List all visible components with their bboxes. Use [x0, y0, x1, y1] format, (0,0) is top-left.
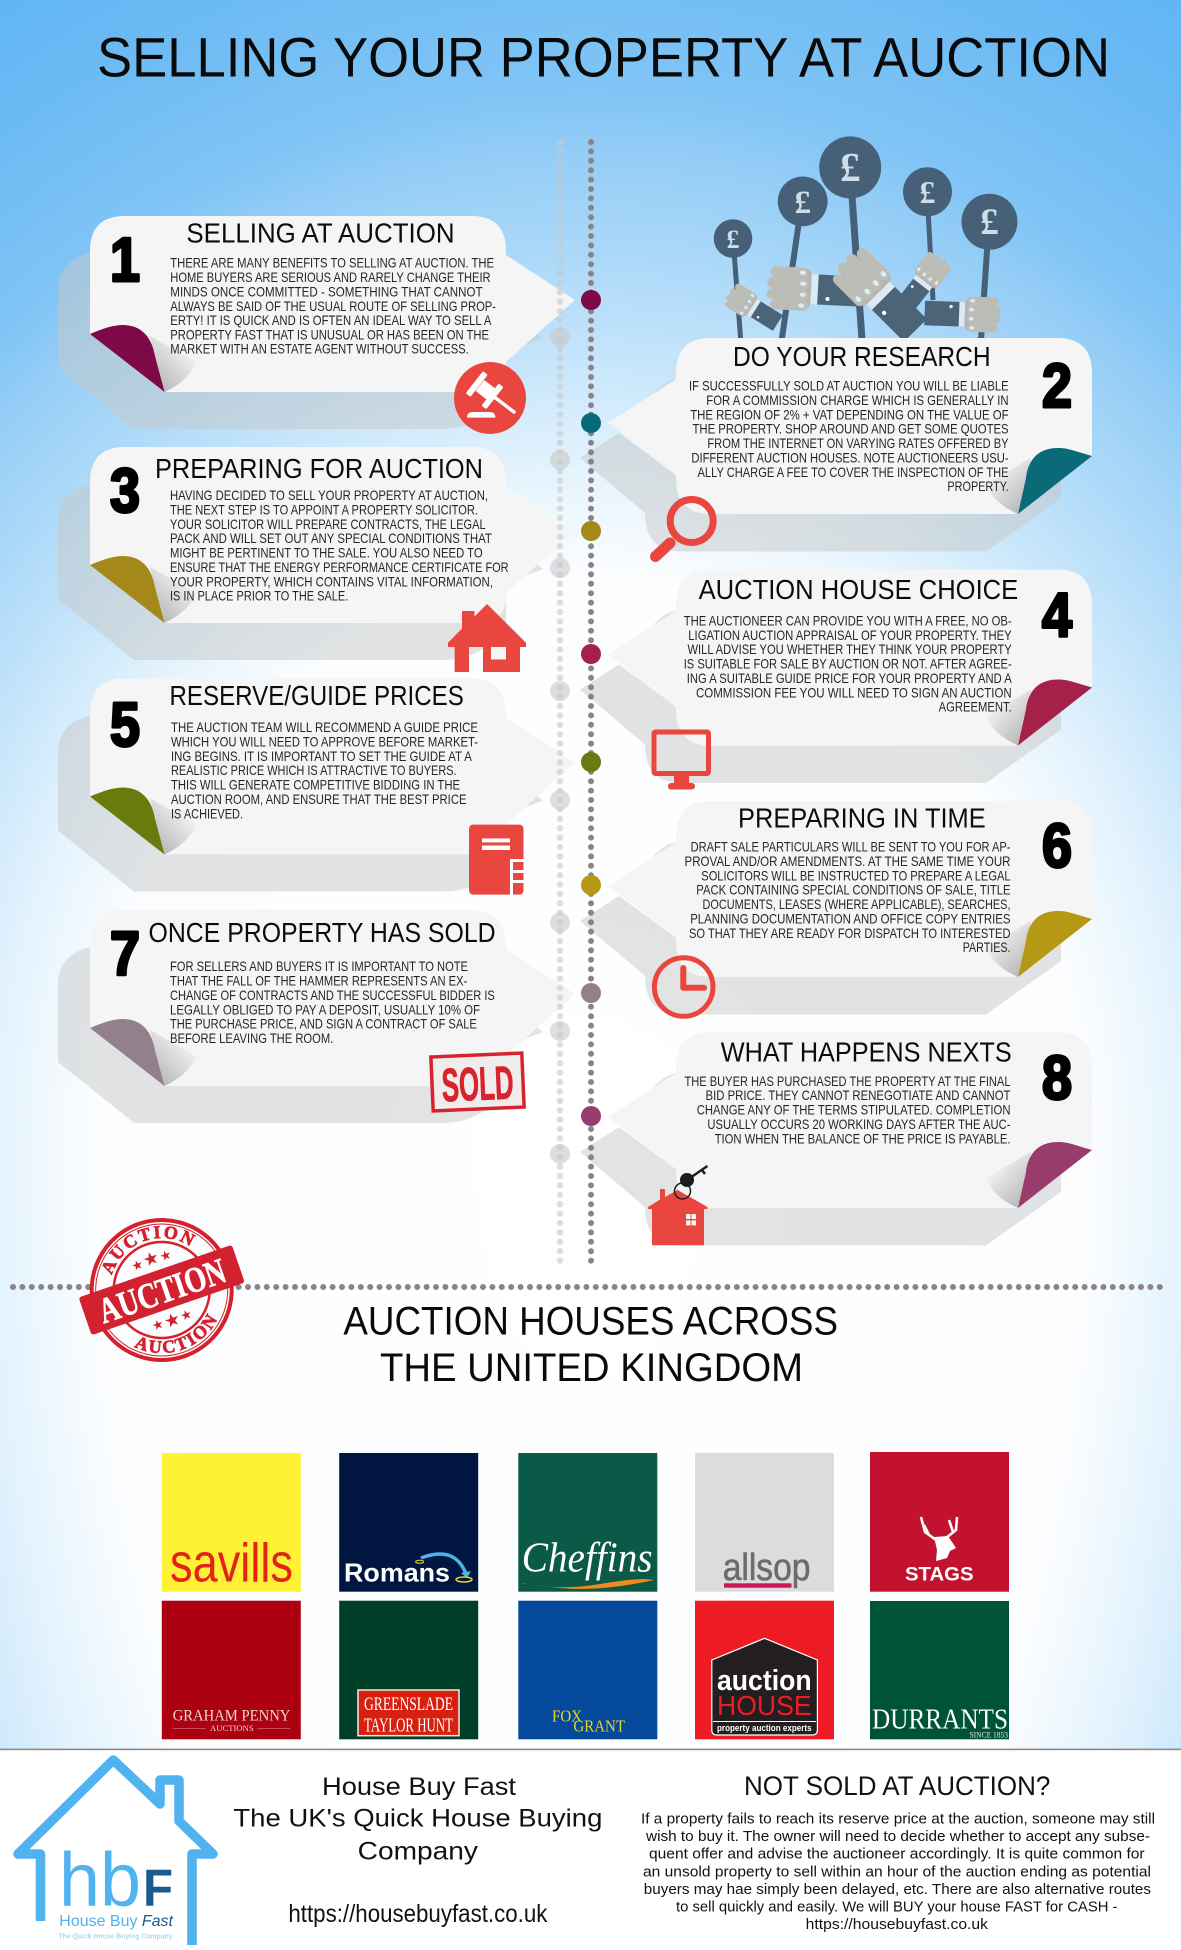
heading: auction houses: [343, 1299, 838, 1390]
body text: TION WHEN THE BALANCE OF THE PRICE IS PAYABLE.: [715, 1131, 1010, 1146]
logo: cheffins: Cheffins: [522, 1536, 653, 1582]
icon: gavel: [454, 362, 526, 434]
illustration: hands raising bidding paddles: £: [920, 174, 936, 210]
body text: THE AUCTION TEAM WILL RECOMMEND A GUIDE PRICE: [171, 720, 478, 735]
body text: MARKET WITH AN ESTATE AGENT WITHOUT SUCCESS.: [170, 342, 469, 357]
heading: auction houses: THE UNITED KINGDOM: [380, 1346, 803, 1390]
body text: ERTY! IT IS QUICK AND IS OFTEN AN IDEAL WAY TO SELL A: [170, 313, 492, 328]
company details: [233, 1773, 602, 1928]
panel 4: auction house choice: [580, 570, 1092, 790]
body text: WILL ADVISE YOU WHETHER THEY THINK YOUR PROPERTY: [688, 642, 1012, 657]
heading: DO YOUR RESEARCH: [733, 341, 991, 372]
body text: [170, 256, 496, 357]
logo: greenslade taylor hunt: GREENSLADE: [364, 1694, 453, 1715]
body text: MIGHT BE PERTINENT TO THE SALE. YOU ALSO NEED TO: [170, 546, 483, 560]
step number 2: 2: [1042, 352, 1072, 421]
step number 7: 7: [110, 920, 140, 989]
heading: PREPARING IN TIME: [738, 802, 986, 833]
illustration: hands raising bidding paddles: £: [794, 185, 811, 221]
body text: FOR SELLERS AND BUYERS IT IS IMPORTANT TO NOTE: [170, 959, 468, 974]
body text: THE REGION OF 2% + VAT DEPENDING ON THE VALUE OF: [690, 407, 1009, 422]
company details: Company: [358, 1837, 479, 1865]
logo: greenslade taylor hunt: [339, 1601, 478, 1739]
icon: sold stamp: [431, 1053, 524, 1112]
body text: HOME BUYERS ARE SERIOUS AND RARELY CHANGE THEIR: [170, 270, 491, 285]
logo: auction house: [695, 1601, 834, 1739]
not sold at auction: wish to buy it. The owner will need to decide whether to accept any subse-: [645, 1828, 1150, 1845]
logo: fox grant: FOX: [552, 1707, 582, 1726]
logo: fox grant: GRANT: [573, 1717, 626, 1736]
heading: RESERVE/GUIDE PRICES: [170, 680, 464, 711]
heading: WHAT HAPPENS NEXTS: [721, 1037, 1012, 1068]
body text: FROM THE INTERNET ON VARYING RATES OFFERED BY: [707, 436, 1009, 451]
body text: PACK CONTAINING SPECIAL CONDITIONS OF SALE, TITLE: [696, 883, 1010, 898]
body text: DIFFERENT AUCTION HOUSES. NOTE AUCTIONEERS USU-: [691, 450, 1009, 465]
not sold at auction: [641, 1771, 1155, 1933]
logo: stags: [870, 1452, 1009, 1592]
logo: greenslade taylor hunt: TAYLOR HUNT: [364, 1715, 453, 1737]
logo: durrants: DURRANTS: [872, 1703, 1008, 1735]
body text: BEFORE LEAVING THE ROOM.: [170, 1031, 333, 1046]
body text: AUCTION ROOM, AND ENSURE THAT THE BEST PRICE: [171, 792, 466, 807]
body text: BID PRICE. THEY CANNOT RENEGOTIATE AND CANNOT: [706, 1088, 1011, 1103]
illustration: hands raising bidding paddles: £: [726, 225, 740, 254]
body text: IS ACHIEVED.: [171, 806, 243, 821]
icon: computer monitor: [654, 732, 708, 790]
body text: THAT THE FALL OF THE HAMMER REPRESENTS AN EX-: [170, 974, 467, 989]
heading: auction houses: AUCTION HOUSES ACROSS: [343, 1299, 838, 1343]
panel 6: preparing in time: [580, 801, 1092, 1016]
icon: auction stamp: AUCTION: [102, 1226, 196, 1276]
step number 4: 4: [1042, 581, 1072, 650]
body text: WHICH YOU WILL NEED TO APPROVE BEFORE MARKET-: [171, 734, 478, 749]
not sold at auction: NOT SOLD AT AUCTION?: [744, 1771, 1050, 1801]
body text: ALWAYS BE SAID OF THE USUAL ROUTE OF SELLING PROP-: [170, 299, 496, 314]
panel 2: do your research: [580, 338, 1092, 556]
body text: THE BUYER HAS PURCHASED THE PROPERTY AT THE FINAL: [684, 1074, 1011, 1089]
body text: IF SUCCESSFULLY SOLD AT AUCTION YOU WILL BE LIABLE: [689, 378, 1009, 394]
company details: The UK's Quick House Buying: [233, 1805, 602, 1833]
logo: house buy fast: [18, 1760, 213, 1945]
logo: graham penny: GRAHAM PENNY: [173, 1708, 290, 1725]
body text: ING A SUITABLE GUIDE PRICE FOR YOUR PROPERTY AND A: [687, 671, 1012, 686]
logo: auction house: HOUSE: [717, 1690, 812, 1721]
body text: SOLICITORS WILL BE INSTRUCTED TO PREPARE A LEGAL: [701, 868, 1011, 883]
logo: savills: savills: [170, 1532, 293, 1594]
heading: AUCTION HOUSE CHOICE: [699, 574, 1018, 605]
body text: COMMISSION FEE YOU WILL NEED TO SIGN AN AUCTION: [696, 685, 1012, 700]
icon: auction stamp: [79, 1218, 244, 1362]
body text: DOCUMENTS, LEASES (WHERE APPLICABLE), SEARCHES,: [702, 897, 1010, 912]
body text: [689, 378, 1009, 494]
body text: CHANGE OF CONTRACTS AND THE SUCCESSFUL BIDDER IS: [170, 988, 495, 1003]
logo: romans: [339, 1453, 478, 1592]
body text: THE AUCTIONEER CAN PROVIDE YOU WITH A FREE, NO OB-: [684, 613, 1012, 628]
logo: auction house: property auction experts: [717, 1723, 812, 1733]
logo: romans: Romans: [344, 1558, 450, 1588]
body text: PROPERTY.: [947, 479, 1009, 494]
logo: durrants: SINCE 1853: [970, 1730, 1008, 1739]
body text: DRAFT SALE PARTICULARS WILL BE SENT TO YOU FOR AP-: [691, 840, 1010, 854]
company details: House Buy Fast: [322, 1773, 516, 1801]
body text: ING BEGINS. IT IS IMPORTANT TO SET THE GUIDE AT A: [171, 749, 473, 764]
body text: LIGATION AUCTION APPRAISAL OF YOUR PROPERTY. THEY: [688, 628, 1012, 643]
body text: [684, 613, 1012, 715]
body text: REALISTIC PRICE WHICH IS ATTRACTIVE TO BUYERS.: [171, 763, 457, 778]
icon: auction stamp: ★: [178, 1306, 194, 1324]
body text: YOUR PROPERTY, WHICH CONTAINS VITAL INFORMATION,: [170, 574, 493, 589]
step number 3: 3: [110, 457, 140, 526]
icon: clock: [654, 958, 713, 1016]
heading: SELLING AT AUCTION: [186, 217, 455, 248]
icon: auction stamp: AUCTION: [134, 1312, 218, 1354]
body text: [170, 488, 509, 604]
panel 3: preparing for auction: [58, 447, 575, 672]
body text: SO THAT THEY ARE READY FOR DISPATCH TO INTERESTED: [689, 926, 1011, 941]
body text: PARTIES.: [963, 940, 1010, 955]
body text: PROPERTY FAST THAT IS UNUSUAL OR HAS BEEN ON THE: [170, 328, 489, 343]
logo: durrants: [870, 1601, 1009, 1739]
logo: graham penny: AUCTIONS: [210, 1724, 254, 1733]
illustration: hands raising bidding paddles: [714, 136, 1018, 347]
body text: THE NEXT STEP IS TO APPOINT A PROPERTY SOLICITOR.: [170, 502, 478, 517]
logo: stags: STAGS: [905, 1565, 974, 1586]
panel 5: reserve and guide prices: [58, 678, 575, 895]
logo: house buy fast: F: [143, 1860, 173, 1918]
heading: ONCE PROPERTY HAS SOLD: [148, 917, 496, 948]
icon: sold stamp: SOLD: [440, 1055, 515, 1112]
body text: ENSURE THAT THE ENERGY PERFORMANCE CERTIFICATE FOR: [170, 560, 509, 575]
body text: PACK AND WILL SET OUT ANY SPECIAL CONDITIONS THAT: [170, 531, 492, 546]
body text: MINDS ONCE COMMITTED - SOMETHING THAT CANNOT: [170, 284, 483, 299]
body text: IS IN PLACE PRIOR TO THE SALE.: [170, 589, 348, 604]
body text: PLANNING DOCUMENTATION AND OFFICE COPY ENTRIES: [690, 911, 1010, 926]
body text: IS SUITABLE FOR SALE BY AUCTION OR NOT. AFTER AGREE-: [684, 657, 1012, 672]
icon: house with key: [648, 1166, 707, 1245]
body text: ALLY CHARGE A FEE TO COVER THE INSPECTION OF THE: [698, 465, 1009, 480]
not sold at auction: If a property fails to reach its reserve price at the auction, someone may still: [641, 1810, 1155, 1827]
logo: house buy fast: hb: [59, 1838, 141, 1923]
icon: auction stamp: ★: [140, 1247, 162, 1271]
icon: auction stamp: AUCTION: [93, 1251, 231, 1331]
body text: HAVING DECIDED TO SELL YOUR PROPERTY AT AUCTION,: [170, 488, 488, 503]
heading: PREPARING FOR AUCTION: [155, 453, 483, 484]
body text: THE PROPERTY. SHOP AROUND AND GET SOME QUOTES: [692, 422, 1009, 437]
icon: auction stamp: ★: [150, 1316, 166, 1334]
logo: graham penny: [162, 1601, 301, 1739]
icon: magnifying glass: [656, 500, 713, 556]
logo: auction house: auction: [717, 1665, 812, 1697]
body text: LEGALLY OBLIGED TO PAY A DEPOSIT, USUALLY 10% OF: [170, 1002, 480, 1017]
icon: house: [448, 604, 526, 672]
not sold at auction: quent offer and advise the auctioneer accordingly. It is quite common for: [649, 1846, 1145, 1863]
body text: THIS WILL GENERATE COMPETITIVE BIDDING IN THE: [171, 778, 460, 793]
body text: YOUR SOLICITOR WILL PREPARE CONTRACTS, THE LEGAL: [170, 517, 486, 532]
illustration: hands raising bidding paddles: £: [840, 144, 860, 190]
logo: house buy fast: House Buy Fast: [59, 1913, 174, 1930]
company details: https://housebuyfast.co.uk: [288, 1900, 548, 1928]
body text: AGREEMENT.: [939, 700, 1012, 715]
body text: CHANGE ANY OF THE TERMS STIPULATED. COMPLETION: [697, 1103, 1010, 1118]
icon: notebook: [469, 825, 524, 895]
logo: allsop: [695, 1453, 834, 1592]
panel 8: what happens nexts: [580, 1032, 1092, 1246]
timeline: dotted columns with step markers: [550, 142, 601, 1264]
body text: USUALLY OCCURS 20 WORKING DAYS AFTER THE AUC-: [707, 1117, 1010, 1132]
step number 8: 8: [1042, 1044, 1072, 1113]
body text: FOR A COMMISSION CHARGE WHICH IS GENERALLY IN: [706, 393, 1009, 408]
not sold at auction: an unsold property to sell within an hour of the auction ending as potential: [643, 1863, 1151, 1880]
not sold at auction: buyers may hae simply been delayed, etc. There are also alternative routes: [644, 1881, 1151, 1898]
footer panel: [0, 1749, 1181, 1950]
not sold at auction: https://housebuyfast.co.uk: [806, 1916, 989, 1933]
step number 6: 6: [1042, 812, 1072, 881]
logo: fox grant: [518, 1601, 657, 1739]
title: SELLING YOUR PROPERTY AT AUCTION: [97, 26, 1110, 89]
body text: [684, 1074, 1011, 1146]
body text: PROVAL AND/OR AMENDMENTS. AT THE SAME TIME YOUR: [684, 854, 1011, 869]
body text: THE PURCHASE PRICE, AND SIGN A CONTRACT OF SALE: [170, 1017, 477, 1032]
logo: cheffins: [518, 1453, 657, 1592]
panel 7: once property has sold: [58, 910, 575, 1123]
step number 5: 5: [110, 691, 140, 760]
logo: allsop: allsop: [723, 1547, 810, 1589]
body text: THERE ARE MANY BENEFITS TO SELLING AT AUCTION. THE: [170, 256, 494, 271]
logo: savills: [162, 1453, 301, 1594]
body text: [170, 959, 495, 1046]
logo: house buy fast: The Quick House Buying Company: [58, 1931, 173, 1940]
icon: auction stamp: ★: [158, 1246, 174, 1264]
step number 1: 1: [110, 226, 140, 295]
body text: [171, 720, 478, 821]
panel 1: selling at auction: [58, 216, 575, 434]
icon: auction stamp: ★: [129, 1256, 145, 1274]
illustration: hands raising bidding paddles: £: [980, 202, 999, 243]
not sold at auction: to sell quickly and easily. We will BUY your house FAST for CASH -: [676, 1898, 1118, 1915]
body text: [684, 840, 1011, 955]
icon: auction stamp: ★: [161, 1308, 183, 1332]
